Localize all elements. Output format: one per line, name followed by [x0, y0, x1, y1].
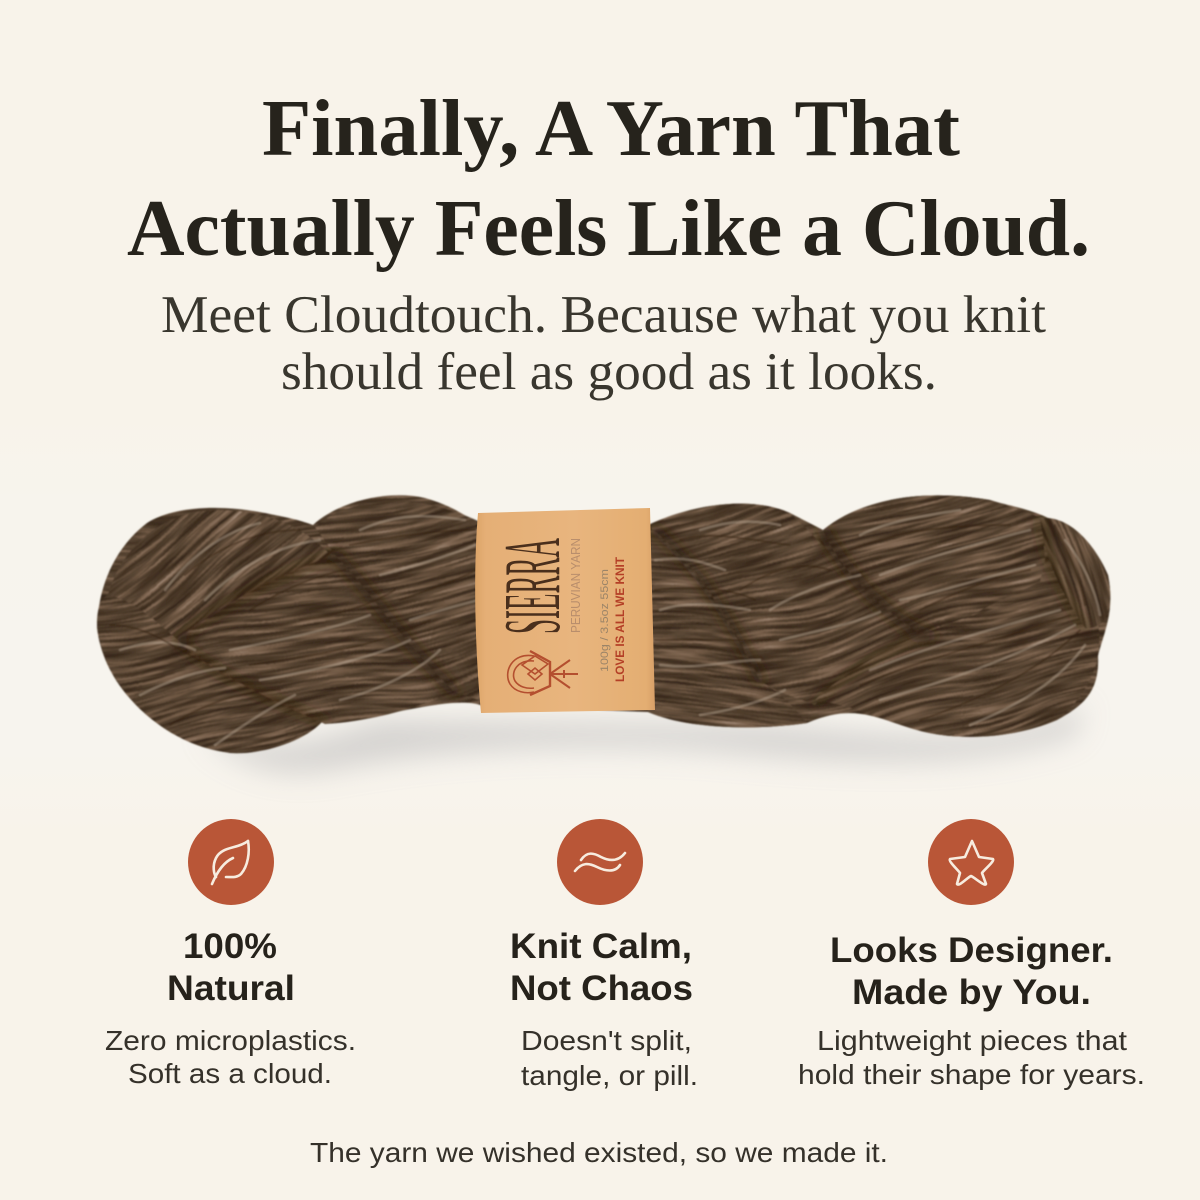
subtitle: should feel as good as it looks. — [281, 343, 937, 401]
feature description — [521, 1025, 698, 1091]
strand lobe: middle left — [180, 556, 454, 725]
feature description: tangle, or pill. — [521, 1060, 698, 1091]
product photo: yarn skein with paper band — [96, 494, 1112, 782]
light strand highlights — [120, 510, 1100, 745]
icon: leaf — [188, 819, 274, 905]
dark strand lines — [110, 525, 1085, 725]
band tagline: LOVE IS ALL WE KNIT — [615, 557, 627, 682]
feature description: hold their shape for years. — [798, 1059, 1145, 1090]
subtitle: Meet Cloudtouch. Because what you knit — [161, 286, 1046, 344]
strand lobe: top right — [824, 494, 1046, 632]
feature: 100% Natural — [105, 819, 356, 1089]
strand lobe: bottom right — [816, 592, 1100, 738]
strand lobe: far left — [96, 595, 318, 752]
icon: star — [928, 819, 1014, 905]
yarn skein — [96, 494, 1112, 754]
feature description: Doesn't split, — [521, 1025, 692, 1056]
feature heading: Natural — [167, 969, 295, 1008]
feature description: Zero microplastics. — [105, 1025, 356, 1056]
title — [127, 85, 1090, 273]
feature heading: 100% — [183, 927, 277, 966]
feature description — [798, 1025, 1145, 1090]
feature heading — [510, 927, 693, 1008]
subtitle — [161, 286, 1046, 401]
feature heading: Not Chaos — [510, 969, 693, 1008]
feature: Knit Calm — [510, 819, 698, 1091]
band subtitle: PERUVIAN YARN — [568, 538, 583, 633]
footer tagline: The yarn we wished existed, so we made it. — [310, 1137, 888, 1168]
icon: waves — [557, 819, 643, 905]
feature: Looks Designer — [798, 819, 1145, 1090]
feature description: Lightweight pieces that — [817, 1025, 1127, 1056]
feature heading — [167, 927, 295, 1008]
feature description — [105, 1025, 356, 1089]
strand lobe: centre right — [650, 502, 914, 705]
strand lobe: upper left — [108, 510, 331, 638]
strand lobe: end knot — [1040, 517, 1110, 628]
strand lobe: right of band — [648, 528, 806, 728]
band weight: 100g / 3.5oz 55cm — [599, 569, 611, 672]
title: Actually Feels Like a Cloud. — [127, 185, 1090, 273]
feature heading: Looks Designer. — [830, 931, 1113, 970]
crease shadows — [178, 518, 1085, 722]
feature heading: Knit Calm, — [510, 927, 692, 966]
strand lobe: near band left — [315, 502, 480, 700]
paper label band — [475, 508, 655, 713]
skein cast shadow — [200, 705, 1085, 773]
feature heading: Made by You. — [852, 973, 1091, 1012]
title: Finally, A Yarn That — [262, 85, 960, 173]
feature description: Soft as a cloud. — [128, 1058, 332, 1089]
band logo — [508, 651, 578, 695]
feature heading — [830, 931, 1113, 1012]
product photo: yarn skein with paper band: SIERRA — [489, 538, 577, 634]
